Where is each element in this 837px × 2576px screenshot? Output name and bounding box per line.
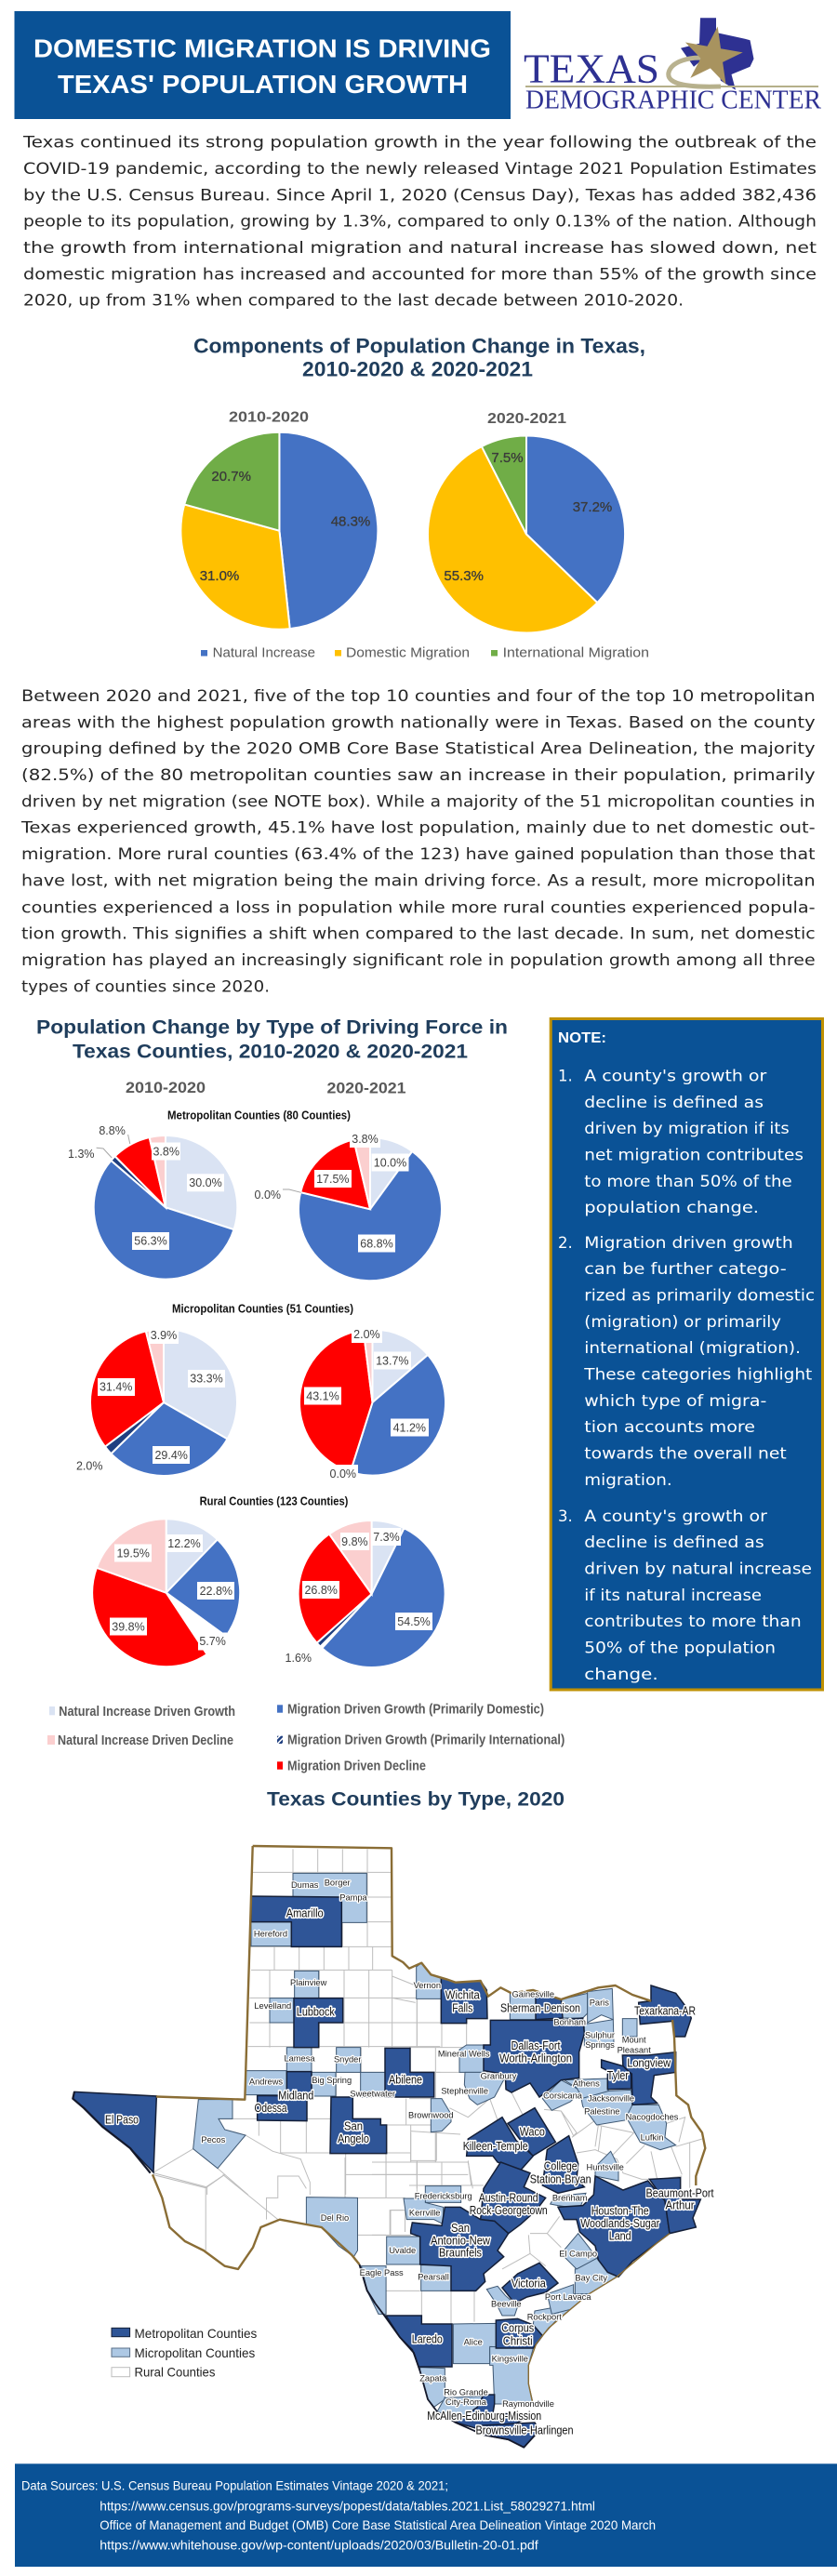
map labels: micropolitan areas: Rockport xyxy=(527,2312,562,2321)
logo: Texas Demographic Center: DEMOGRAPHIC CENTER xyxy=(525,86,821,115)
second paragraph: have lost, with net migration being the main driving force. As a result, more micropolitan xyxy=(21,871,816,889)
data sources footer xyxy=(15,2463,837,2567)
title banner: TEXAS' POPULATION GROWTH xyxy=(58,70,468,99)
map labels: micropolitan areas: Springs xyxy=(585,2040,615,2050)
map legend xyxy=(112,2326,257,2380)
heading: components of population change: Components of Population Change in Texas, xyxy=(193,334,645,357)
note item 2: tion accounts more xyxy=(584,1418,755,1436)
intro paragraph: the growth from international migration and natural increase has slowed down, net xyxy=(23,239,817,257)
map labels: micropolitan areas: Jacksonville xyxy=(588,2094,634,2104)
map labels: metropolitan areas: Laredo xyxy=(412,2332,443,2345)
note item 2: rized as primarily domestic xyxy=(584,1287,815,1304)
pie chart: components 2020-2021: 55.3% xyxy=(444,568,484,584)
logo: Texas Demographic Center: TEXAS xyxy=(524,46,659,91)
map labels: micropolitan areas: Mineral Wells xyxy=(438,2049,490,2058)
second paragraph xyxy=(20,687,816,995)
legend: driving force: Migration Driven Growth (Primarily Domestic) xyxy=(287,1702,544,1718)
map labels: micropolitan areas: Pecos xyxy=(201,2135,226,2144)
map labels: micropolitan areas: Gainesville xyxy=(512,1989,554,1998)
pie chart: rural 2020-2021: 9.8% xyxy=(341,1535,368,1548)
map legend: Metropolitan Counties xyxy=(134,2326,257,2341)
map labels: metropolitan areas: Tyler xyxy=(607,2069,629,2082)
note item 1: population change. xyxy=(584,1199,759,1216)
heading: population change by driving force: Population Change by Type of Driving Force in xyxy=(36,1016,508,1039)
map labels: micropolitan areas: Sweetwater xyxy=(350,2089,395,2098)
note item 3: driven by natural increase xyxy=(584,1560,812,1577)
map labels: micropolitan areas: Del Rio xyxy=(321,2213,349,2223)
map labels: metropolitan areas: Odessa xyxy=(255,2102,287,2115)
map labels: metropolitan areas: Braunfels xyxy=(439,2247,482,2260)
map labels: metropolitan areas: Killeen-Temple xyxy=(463,2140,528,2153)
map labels: metropolitan areas: Victoria xyxy=(512,2277,546,2290)
map labels: metropolitan areas: Angelo xyxy=(338,2132,369,2145)
map labels: micropolitan areas: City-Roma xyxy=(445,2397,487,2407)
note item 3: 50% of the population xyxy=(584,1639,776,1657)
pie chart: metropolitan 2020-2021: 0.0% xyxy=(255,1188,281,1202)
data sources footer: Office of Management and Budget (OMB) Core Base Statistical Area Delineation Vintage 2020 March xyxy=(100,2517,656,2532)
second paragraph: driven by net migration (see NOTE box). While a majority of the 51 micropolitan counties in xyxy=(21,792,816,810)
map labels: metropolitan areas: Christi xyxy=(503,2334,533,2347)
map labels: metropolitan areas: Brownsville-Harlingen xyxy=(476,2423,574,2437)
pie chart: rural 2020-2021: 1.6% xyxy=(286,1652,312,1665)
map labels: micropolitan areas: Fredericksburg xyxy=(415,2192,472,2201)
map labels: metropolitan areas: Austin-Round xyxy=(479,2192,538,2205)
note item 3: 3. xyxy=(558,1507,573,1525)
pie chart: components 2020-2021: 2020-2021 xyxy=(487,411,566,427)
column headings: 2010-2020 xyxy=(126,1079,206,1096)
note box xyxy=(551,1019,822,1690)
state border xyxy=(73,1846,705,2448)
intro paragraph: people to its population, growing by 1.3%, compared to only 0.13% of the nation. Although xyxy=(23,213,817,231)
pie chart: components 2020-2021: 7.5% xyxy=(491,450,524,466)
pie chart: micropolitan 2020-2021: 41.2% xyxy=(393,1421,426,1434)
pie chart: rural 2020-2021 xyxy=(286,1520,445,1667)
map labels: micropolitan areas: Stephenville xyxy=(441,2087,488,2096)
note item 1: 1. xyxy=(558,1068,573,1085)
map labels: micropolitan areas: Andrews xyxy=(249,2078,283,2087)
pie chart: metropolitan 2020-2021: 10.0% xyxy=(374,1157,406,1170)
map labels: metropolitan areas: Longview xyxy=(627,2057,671,2070)
map labels: micropolitan areas: Granbury xyxy=(481,2071,517,2080)
map labels: micropolitan areas: Raymondville xyxy=(502,2399,554,2409)
note item 3: change. xyxy=(584,1666,658,1683)
note item 1: to more than 50% of the xyxy=(584,1173,792,1190)
pie chart: metropolitan 2010-2020: 1.3% xyxy=(68,1148,95,1161)
legend: components: International Migration xyxy=(503,645,649,661)
map labels: metropolitan areas: San xyxy=(451,2222,470,2235)
pie chart: rural 2020-2021: 54.5% xyxy=(397,1615,431,1628)
pie chart: components 2020-2021 xyxy=(428,411,625,632)
note item 2: Migration driven growth xyxy=(584,1234,793,1252)
map labels: micropolitan areas: Pearsall xyxy=(418,2273,449,2282)
note item 3: if its natural increase xyxy=(584,1587,762,1604)
pie chart: metropolitan 2010-2020: 56.3% xyxy=(134,1235,167,1248)
legend: driving force: Migration Driven Growth (Primarily International) xyxy=(287,1733,565,1748)
map labels: micropolitan areas: Snyder xyxy=(334,2054,361,2064)
note item 3: contributes to more than xyxy=(584,1613,802,1630)
map labels: metropolitan areas: Arthur xyxy=(666,2199,694,2212)
second paragraph: areas with the highest population growth nationally were in Texas. Based on the county xyxy=(21,713,816,731)
map labels: micropolitan areas: Lufkin xyxy=(641,2133,663,2143)
map labels: micropolitan areas: Port Lavaca xyxy=(545,2292,591,2302)
pie chart: components 2020-2021: 37.2% xyxy=(573,499,612,515)
column headings xyxy=(126,1079,405,1097)
second paragraph: counties experienced a loss in population while more rural counties experienced popula- xyxy=(21,898,816,916)
map labels: metropolitan areas: Station-Bryan xyxy=(530,2173,591,2186)
map labels: micropolitan areas: Corsicana xyxy=(543,2091,583,2101)
second paragraph: (82.5%) of the 80 metropolitan counties saw an increase in their population, primarily xyxy=(21,766,816,784)
legend: driving force: Natural Increase Driven Decline xyxy=(58,1733,233,1748)
heading: population change by driving force: Texas Counties, 2010-2020 & 2020-2021 xyxy=(73,1040,468,1062)
pie chart: metropolitan 2010-2020: 8.8% xyxy=(99,1124,126,1137)
metropolitan counties xyxy=(73,1896,700,2448)
pie chart: components 2010-2020: 20.7% xyxy=(211,469,251,485)
pie chart: rural 2010-2020: 22.8% xyxy=(200,1585,232,1598)
pie chart: metropolitan 2010-2020: 30.0% xyxy=(189,1176,222,1189)
map labels: micropolitan areas: Kerrville xyxy=(409,2209,440,2218)
pie chart: rural 2010-2020: 39.8% xyxy=(112,1620,145,1633)
map labels: micropolitan areas: Hereford xyxy=(254,1929,287,1938)
note item 1 xyxy=(558,1068,804,1216)
note item 2: These categories highlight xyxy=(583,1365,813,1384)
title banner: DOMESTIC MIGRATION IS DRIVING xyxy=(33,34,491,63)
map labels: micropolitan areas: Rio Grande xyxy=(444,2387,488,2397)
note box: NOTE: xyxy=(558,1030,606,1046)
pie chart: micropolitan 2010-2020: 2.0% xyxy=(76,1460,102,1473)
note item 2: towards the overall net xyxy=(584,1444,787,1462)
map labels: micropolitan areas: Plainview xyxy=(290,1978,327,1987)
legend: components: Domestic Migration xyxy=(346,645,470,661)
pie chart: components 2010-2020: 48.3% xyxy=(331,514,370,530)
pie chart: rural 2010-2020: 12.2% xyxy=(167,1537,201,1550)
map labels: metropolitan areas: Falls xyxy=(452,2001,472,2014)
pie chart: rural 2010-2020 xyxy=(92,1519,240,1666)
map labels: metropolitan areas: Amarillo xyxy=(286,1907,324,1920)
intro paragraph: 2020, up from 31% when compared to the last decade between 2010-2020. xyxy=(23,292,684,310)
note item 2: which type of migra- xyxy=(584,1392,766,1410)
second paragraph: migration has played an increasingly significant role in population growth among all three xyxy=(21,951,816,969)
pie chart: micropolitan 2010-2020: 3.9% xyxy=(151,1329,177,1342)
map labels: micropolitan areas: Zapata xyxy=(419,2373,447,2383)
map labels: micropolitan areas: Brownwood xyxy=(408,2110,454,2119)
pie chart: metropolitan 2020-2021: 3.8% xyxy=(352,1133,379,1146)
map labels: micropolitan areas: Bonham xyxy=(553,2018,586,2027)
second paragraph: grouping defined by the 2020 OMB Core Base Statistical Area Delineation, the majority xyxy=(21,740,816,758)
map labels: metropolitan areas: Midland xyxy=(278,2090,313,2103)
map labels: micropolitan areas: Big Spring xyxy=(312,2076,352,2085)
map labels: micropolitan areas: Mount xyxy=(622,2036,646,2045)
map labels: micropolitan areas: Pleasant xyxy=(618,2045,651,2054)
logo: Texas Demographic Center xyxy=(524,18,821,115)
map labels: micropolitan areas: Pampa xyxy=(339,1892,368,1902)
legend: components xyxy=(201,645,649,661)
map labels: micropolitan areas xyxy=(201,1878,679,2409)
pie chart: rural 2020-2021: 7.3% xyxy=(373,1531,400,1544)
column headings: 2020-2021 xyxy=(327,1080,405,1097)
map labels: metropolitan areas: Antonio-New xyxy=(431,2234,491,2247)
intro paragraph xyxy=(22,134,817,310)
map labels: metropolitan areas: San xyxy=(344,2120,363,2133)
note item 2: can be further catego- xyxy=(584,1260,787,1278)
map labels: metropolitan areas: Rock-Georgetown xyxy=(470,2204,548,2217)
map labels: metropolitan areas: El Paso xyxy=(105,2113,139,2126)
map labels: metropolitan areas xyxy=(105,1907,714,2437)
map labels: metropolitan areas: College xyxy=(544,2159,578,2172)
data sources footer: https://www.census.gov/programs-surveys/popest/data/tables.2021.List_58029271.html xyxy=(100,2498,595,2513)
map labels: metropolitan areas: Land xyxy=(609,2229,631,2242)
map labels: metropolitan areas: McAllen-Edinburg-Mission xyxy=(427,2410,541,2423)
map legend: Rural Counties xyxy=(134,2365,215,2380)
pie chart: micropolitan 2020-2021: 43.1% xyxy=(306,1389,339,1402)
micropolitan counties xyxy=(193,1873,676,2418)
pie chart: micropolitan 2010-2020: 31.4% xyxy=(100,1381,132,1394)
map labels: metropolitan areas: Corpus xyxy=(501,2321,534,2334)
intro paragraph: COVID-19 pandemic, according to the newly released Vintage 2021 Population Estimates xyxy=(23,160,817,178)
map labels: micropolitan areas: Vernon xyxy=(414,1981,441,1990)
map labels: micropolitan areas: Dumas xyxy=(291,1880,319,1890)
map legend: Micropolitan Counties xyxy=(134,2345,255,2360)
note item 3: decline is defined as xyxy=(584,1534,764,1551)
pie chart: micropolitan 2020-2021 xyxy=(299,1325,445,1482)
map labels: micropolitan areas: Lamesa xyxy=(284,2054,315,2064)
subtitle: metropolitan counties: Metropolitan Counties (80 Counties) xyxy=(167,1108,351,1122)
note item 2: migration. xyxy=(584,1471,672,1489)
map labels: metropolitan areas: Texarkana-AR xyxy=(634,2005,696,2018)
pie chart: metropolitan 2020-2021: 68.8% xyxy=(360,1237,393,1250)
legend: driving force xyxy=(47,1702,565,1773)
map labels: metropolitan areas: Houston-The xyxy=(591,2205,649,2218)
map: Texas counties by type xyxy=(73,1846,714,2448)
pie chart: rural 2020-2021: 26.8% xyxy=(304,1584,338,1597)
note item 3: A county's growth or xyxy=(584,1507,767,1525)
map labels: micropolitan areas: Beeville xyxy=(491,2300,522,2309)
map labels: metropolitan areas: Lubbock xyxy=(297,2005,335,2018)
note item 2: international (migration). xyxy=(584,1339,801,1357)
map labels: micropolitan areas: Borger xyxy=(325,1878,351,1887)
map labels: micropolitan areas: Kingsville xyxy=(492,2355,528,2364)
note item 1: net migration contributes xyxy=(584,1146,804,1164)
heading: Texas counties by type: Texas Counties by Type, 2020 xyxy=(267,1788,565,1811)
note item 2: 2. xyxy=(558,1234,573,1252)
data sources footer: Data Sources: U.S. Census Bureau Population Estimates Vintage 2020 & 2021; xyxy=(21,2478,448,2493)
map labels: micropolitan areas: Alice xyxy=(464,2338,483,2347)
intro paragraph: Texas continued its strong population growth in the year following the outbreak of the xyxy=(22,134,817,152)
title banner xyxy=(15,11,511,119)
heading: components of population change: 2010-2020 & 2020-2021 xyxy=(302,357,533,380)
data sources footer: https://www.whitehouse.gov/wp-content/uploads/2020/03/Bulletin-20-01.pdf xyxy=(100,2538,538,2553)
map labels: metropolitan areas: Wichita xyxy=(445,1988,480,2001)
second paragraph: tion growth. This signifies a shift when compared to the last decade. In sum, net domestic xyxy=(21,925,816,943)
map labels: micropolitan areas: Bay City xyxy=(575,2273,607,2282)
subtitle: rural counties: Rural Counties (123 Counties) xyxy=(200,1494,348,1507)
pie chart: metropolitan 2020-2021: 17.5% xyxy=(316,1173,350,1186)
map labels: micropolitan areas: Athens xyxy=(573,2079,600,2089)
second paragraph: Between 2020 and 2021, five of the top 10 counties and four of the top 10 metropolitan xyxy=(21,687,816,705)
map labels: metropolitan areas: Beaumont-Port xyxy=(645,2186,714,2199)
second paragraph: Texas experienced growth, 45.1% have lost population, mainly due to net domestic out- xyxy=(20,819,816,837)
pie chart: micropolitan 2020-2021: 13.7% xyxy=(376,1354,409,1367)
heading: components of population change xyxy=(193,334,645,380)
pie chart: rural 2010-2020: 5.7% xyxy=(199,1635,226,1648)
pie chart: components 2010-2020: 2010-2020 xyxy=(229,409,309,425)
pie chart: components 2010-2020: 31.0% xyxy=(200,568,239,584)
note item 1: driven by migration if its xyxy=(584,1120,790,1137)
pie chart: micropolitan 2010-2020: 33.3% xyxy=(190,1373,223,1386)
map labels: micropolitan areas: Sulphur xyxy=(585,2030,615,2039)
heading: population change by driving force xyxy=(36,1016,508,1062)
note item 2 xyxy=(558,1234,815,1489)
map labels: micropolitan areas: Paris xyxy=(590,1998,609,2008)
pie chart: components 2010-2020 xyxy=(180,409,378,630)
pie chart: micropolitan 2010-2020 xyxy=(76,1326,237,1476)
map labels: micropolitan areas: El Campo xyxy=(559,2250,597,2259)
map labels: metropolitan areas: Abilene xyxy=(389,2074,422,2087)
pie chart: rural 2010-2020: 19.5% xyxy=(116,1547,150,1560)
note item 1: decline is defined as xyxy=(584,1094,764,1111)
second paragraph: migration. More rural counties (63.4% of the 123) have gained population than those that xyxy=(21,845,816,863)
map labels: metropolitan areas: Worth-Arlington xyxy=(499,2052,572,2065)
pie chart: micropolitan 2020-2021: 0.0% xyxy=(330,1467,356,1481)
map labels: micropolitan areas: Levelland xyxy=(254,2001,291,2011)
map labels: micropolitan areas: Brenham xyxy=(552,2194,588,2203)
map labels: metropolitan areas: Sherman-Denison xyxy=(500,2001,580,2014)
map labels: micropolitan areas: Eagle Pass xyxy=(360,2268,404,2277)
note item 1: A county's growth or xyxy=(584,1068,767,1085)
map labels: micropolitan areas: Uvalde xyxy=(389,2246,416,2255)
map labels: metropolitan areas: Woodlands-Sugar xyxy=(580,2217,659,2230)
intro paragraph: domestic migration has increased and accounted for more than 55% of the growth since xyxy=(23,265,817,283)
legend: components: Natural Increase xyxy=(213,645,315,661)
note item 3 xyxy=(558,1507,812,1683)
intro paragraph: by the U.S. Census Bureau. Since April 1, 2020 (Census Day), Texas has added 382,436 xyxy=(23,186,817,204)
legend: driving force: Natural Increase Driven Growth xyxy=(59,1704,235,1720)
second paragraph: types of counties since 2020. xyxy=(21,977,270,995)
legend: driving force: Migration Driven Decline xyxy=(287,1758,426,1773)
map labels: metropolitan areas: Dallas-Fort xyxy=(512,2039,561,2052)
pie chart: metropolitan 2010-2020 xyxy=(68,1124,237,1280)
map labels: metropolitan areas: Waco xyxy=(520,2126,545,2139)
pie chart: micropolitan 2020-2021: 2.0% xyxy=(353,1328,380,1341)
map labels: micropolitan areas: Huntsville xyxy=(587,2163,624,2172)
pie chart: metropolitan 2010-2020: 3.8% xyxy=(153,1146,179,1159)
pie chart: metropolitan 2020-2021 xyxy=(255,1130,442,1281)
map labels: micropolitan areas: Palestine xyxy=(584,2106,619,2116)
map labels: micropolitan areas: Nacogdoches xyxy=(626,2112,679,2121)
pie chart: micropolitan 2010-2020: 29.4% xyxy=(154,1449,188,1462)
note item 2: (migration) or primarily xyxy=(584,1313,781,1331)
subtitle: micropolitan counties: Micropolitan Counties (51 Counties) xyxy=(172,1302,353,1316)
